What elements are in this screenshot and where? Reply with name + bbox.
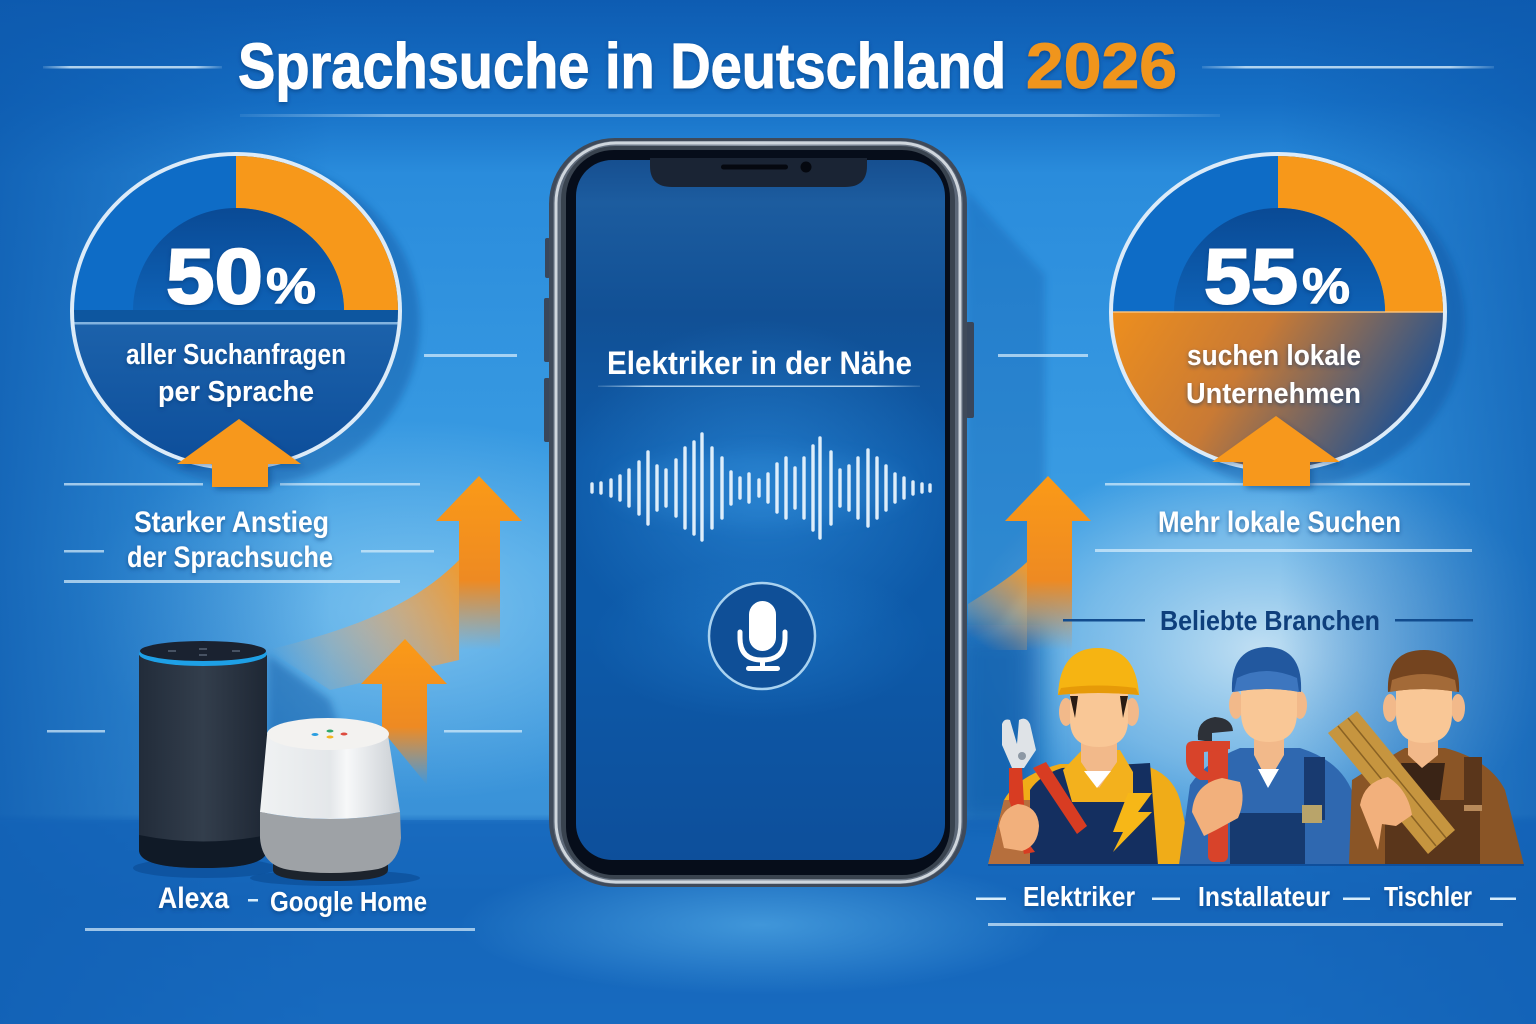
gauge value: 50 bbox=[166, 232, 263, 320]
label: Google Home: Google Home bbox=[270, 886, 427, 917]
phone: sound waveform bbox=[592, 434, 930, 540]
title bbox=[238, 30, 1177, 102]
phone: search query: Elektriker in der Nähe bbox=[607, 345, 912, 381]
icon: google home speaker bbox=[250, 718, 420, 886]
text: starker Anstieg: der Sprachsuche bbox=[127, 541, 333, 574]
tool: pliers bbox=[1002, 719, 1087, 854]
label: Elektriker: Elektriker bbox=[1023, 881, 1135, 912]
tool: wrench bbox=[1186, 717, 1233, 862]
icon: amazon echo speaker bbox=[133, 641, 340, 878]
gauge segment: orange quarter bbox=[1278, 150, 1447, 312]
gauge caption bbox=[1186, 340, 1361, 410]
label: Installateur: Installateur bbox=[1198, 881, 1330, 912]
arrow: up bbox=[177, 419, 301, 487]
text: mehr lokale Suchen: Mehr lokale Suchen bbox=[1158, 506, 1401, 539]
gauge caption: suchen lokale bbox=[1187, 340, 1361, 372]
arrow: growth right bbox=[968, 476, 1091, 650]
panel: 55 percent gauge bbox=[1100, 140, 1465, 488]
gauge caption bbox=[126, 339, 346, 408]
worker: elektriker bbox=[988, 648, 1194, 865]
text: starker Anstieg bbox=[127, 506, 333, 574]
tool: wooden plank bbox=[1328, 711, 1455, 854]
gauge value: 55 bbox=[1204, 232, 1298, 320]
gauge caption: per Sprache bbox=[158, 376, 314, 408]
workers bbox=[988, 647, 1524, 865]
gauge value bbox=[1204, 232, 1350, 320]
label: Alexa: Alexa bbox=[158, 882, 229, 915]
arrow: growth left large bbox=[268, 476, 522, 690]
heading: beliebte Branchen: Beliebte Branchen bbox=[1160, 605, 1380, 636]
decorative lines bbox=[47, 354, 1503, 931]
phone bbox=[544, 138, 974, 887]
label: Tischler: Tischler bbox=[1384, 881, 1472, 912]
gauge caption: Unternehmen bbox=[1186, 378, 1361, 410]
title: main text: Sprachsuche in Deutschland bbox=[238, 30, 1006, 102]
gauge value: % bbox=[266, 258, 316, 314]
worker: installateur bbox=[1179, 647, 1369, 865]
phone: microphone icon bbox=[709, 583, 815, 689]
arrow: up bbox=[1212, 416, 1340, 486]
text: starker Anstieg: Starker Anstieg bbox=[134, 506, 329, 539]
gauge caption: aller Suchanfragen bbox=[126, 339, 346, 371]
arrow: growth left small bbox=[361, 639, 447, 785]
gauge value: % bbox=[1302, 258, 1350, 314]
panel: 50 percent gauge bbox=[60, 140, 420, 492]
footer band under workers bbox=[988, 864, 1524, 866]
phone: side buttons bbox=[544, 238, 974, 442]
gauge segment: orange quarter bbox=[236, 150, 402, 311]
phone: notch bbox=[650, 158, 867, 187]
phone: body bbox=[549, 138, 967, 887]
gauge value bbox=[166, 232, 316, 320]
worker: tischler bbox=[1328, 650, 1524, 865]
phone: screen bbox=[560, 160, 960, 860]
title: year: 2026 bbox=[1026, 30, 1177, 102]
